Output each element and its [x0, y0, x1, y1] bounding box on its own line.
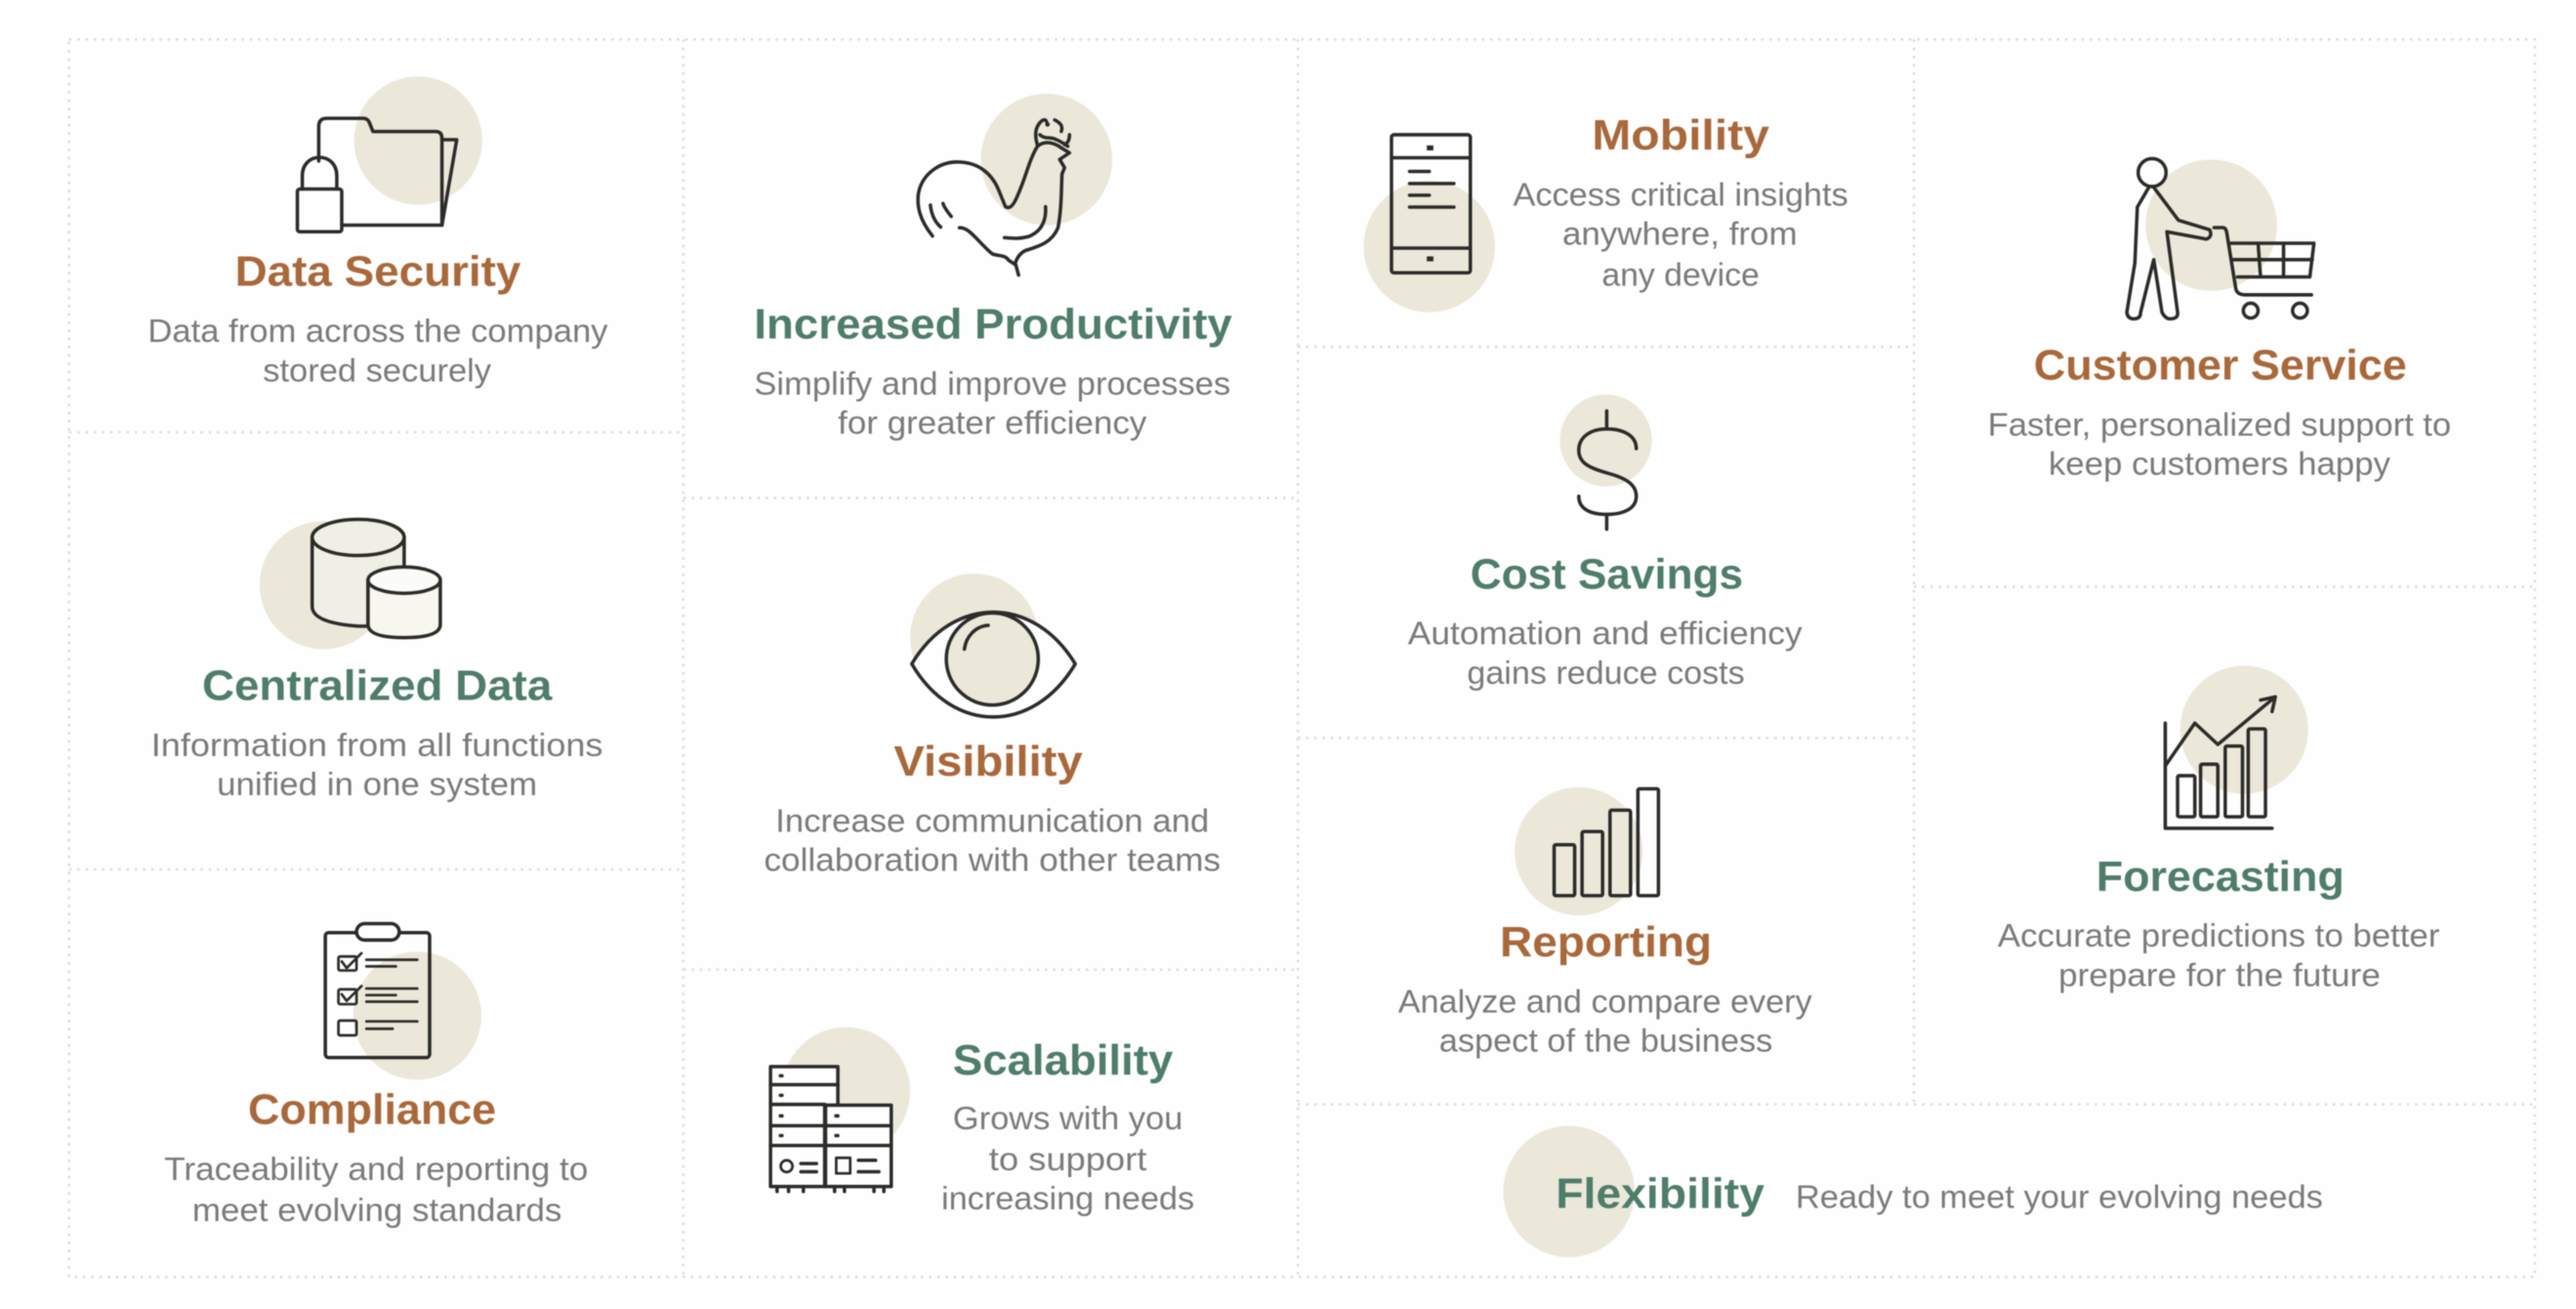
panel: scalability [770, 1027, 1194, 1217]
text: centralized data description: unified in one system [217, 767, 537, 803]
text: compliance description [164, 1152, 588, 1229]
text: cost savings description: Automation and efficiency [1408, 615, 1803, 652]
text: compliance description: Traceability and reporting to [164, 1152, 588, 1188]
text: forecasting description: Accurate predictions to better [1998, 918, 2439, 954]
heading: increased productivity: Increased Productivity [754, 301, 1232, 349]
panel: cost savings [1408, 395, 1803, 692]
panel: forecasting [1998, 665, 2439, 993]
text: reporting description: aspect of the business [1439, 1024, 1772, 1060]
panel: data security [147, 76, 608, 389]
heading: mobility: Mobility [1592, 111, 1770, 159]
icon: bar chart [1515, 787, 1658, 915]
icon: dollar sign [1559, 395, 1652, 529]
text: forecasting description: prepare for the future [2058, 957, 2381, 993]
text: mobility description: anywhere, from [1562, 217, 1798, 253]
icon: server racks [770, 1027, 910, 1192]
text: customer service description [1988, 407, 2451, 483]
text: increased productivity description [754, 366, 1230, 442]
text: customer service description: keep customers happy [2049, 446, 2390, 483]
text: compliance description: meet evolving standards [192, 1193, 561, 1229]
text: centralized data description [151, 728, 602, 803]
icon: rooster [918, 94, 1112, 275]
heading: cost savings: Cost Savings [1471, 550, 1743, 598]
text: visibility description [764, 803, 1221, 879]
heading: data security: Data Security [235, 248, 521, 296]
heading: reporting: Reporting [1500, 918, 1712, 966]
heading: compliance: Compliance [248, 1086, 496, 1134]
icon: folder with padlock [298, 76, 482, 232]
text: cost savings description [1408, 615, 1803, 692]
icon: database cylinders [260, 520, 440, 650]
text: scalability description: Grows with you [953, 1101, 1183, 1137]
text: centralized data description: Information from all functions [151, 728, 602, 764]
heading: visibility: Visibility [893, 738, 1083, 785]
heading: forecasting: Forecasting [2097, 853, 2345, 901]
icon: eye [910, 573, 1075, 717]
text: mobility description: any device [1601, 258, 1760, 294]
panel: flexibility [1503, 1125, 2323, 1257]
panel: increased productivity [754, 94, 1232, 442]
text: scalability description: increasing needs [941, 1181, 1194, 1217]
text: forecasting description [1998, 918, 2439, 993]
panel: centralized data [151, 520, 602, 803]
text: scalability description: to support [989, 1142, 1147, 1178]
text: visibility description: Increase communication and [775, 803, 1209, 839]
icon: mobile device [1363, 135, 1495, 313]
text: flexibility description: Ready to meet your evolving needs [1796, 1180, 2323, 1216]
panel: mobility [1363, 111, 1849, 313]
text: data security description [147, 314, 608, 389]
text: mobility description: Access critical insights [1513, 177, 1849, 213]
text: data security description: stored securely [263, 353, 491, 389]
panel: reporting [1398, 787, 1812, 1060]
text: visibility description: collaboration with other teams [764, 843, 1221, 879]
heading: scalability: Scalability [953, 1036, 1174, 1084]
text: reporting description [1398, 984, 1812, 1060]
text: data security description: Data from across the company [147, 314, 608, 350]
icon: growth chart with arrow [2165, 665, 2308, 828]
heading: centralized data: Centralized Data [202, 662, 553, 710]
panel: compliance [164, 923, 588, 1229]
text: customer service description: Faster, personalized support to [1988, 407, 2451, 443]
heading: flexibility: Flexibility [1556, 1170, 1766, 1218]
text: reporting description: Analyze and compare every [1398, 984, 1812, 1020]
heading: customer service: Customer Service [2034, 342, 2407, 390]
icon: shopper with cart [2127, 158, 2314, 318]
text: increased productivity description: Simplify and improve processes [754, 366, 1230, 402]
text: increased productivity description: for greater efficiency [838, 405, 1147, 442]
icon: clipboard checklist [325, 923, 481, 1079]
panel: visibility [764, 573, 1221, 879]
text: mobility description [1513, 177, 1849, 294]
text: scalability description [941, 1101, 1194, 1217]
text: cost savings description: gains reduce costs [1467, 655, 1745, 692]
panel: customer service [1988, 158, 2451, 483]
icon: flexibility circle [1503, 1125, 1635, 1257]
